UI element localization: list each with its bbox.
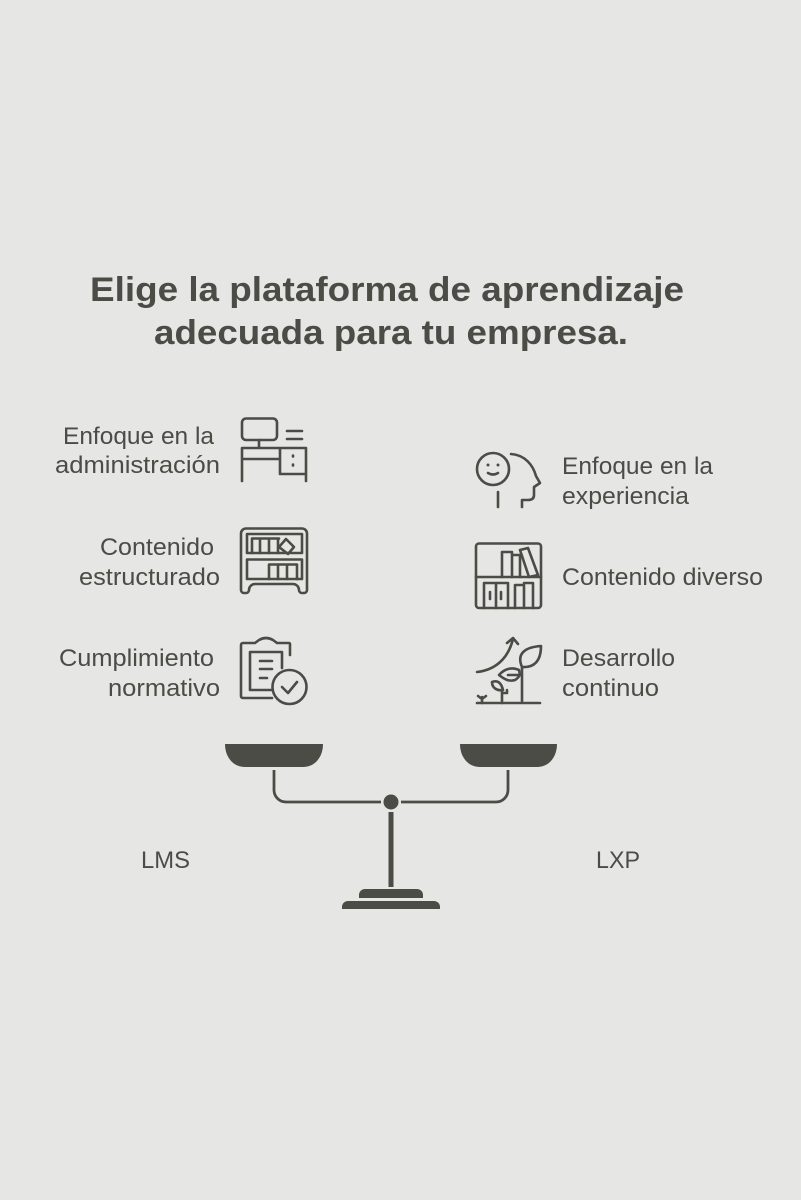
title: adecuada para tu empresa. bbox=[154, 314, 628, 352]
icon: growing plants bbox=[477, 638, 541, 703]
beam bbox=[274, 770, 508, 802]
lower base bbox=[342, 901, 440, 909]
text: Cumplimiento normativo: Cumplimiento bbox=[59, 645, 214, 672]
left pan bbox=[225, 744, 323, 767]
icon: desk with computer bbox=[242, 418, 306, 481]
text: Enfoque en la experiencia: experiencia bbox=[562, 483, 690, 510]
text: Contenido estructurado: Contenido bbox=[100, 534, 214, 561]
text: Desarrollo continuo bbox=[562, 645, 675, 702]
pivot bbox=[384, 794, 398, 810]
label: LXP: LXP bbox=[596, 847, 640, 874]
upper base bbox=[359, 889, 423, 898]
post bbox=[388, 812, 394, 887]
text: Contenido estructurado bbox=[79, 534, 220, 591]
icon: compliance clipboard bbox=[241, 638, 306, 704]
icon: diverse bookshelf bbox=[476, 544, 541, 608]
text: Enfoque en la administración bbox=[55, 423, 220, 479]
text: Enfoque en la experiencia bbox=[562, 453, 714, 510]
text: Contenido estructurado: estructurado bbox=[79, 564, 220, 591]
text: Desarrollo continuo: continuo bbox=[562, 675, 659, 702]
panel: LMS features bbox=[55, 418, 307, 704]
panel: LXP features bbox=[476, 453, 763, 703]
title bbox=[90, 271, 684, 352]
text: Enfoque en la experiencia: Enfoque en la bbox=[562, 453, 714, 480]
icon: head with smiling face bbox=[477, 453, 540, 507]
text: Contenido diverso: Contenido diverso bbox=[562, 564, 763, 591]
text: Enfoque en la administración: Enfoque en la bbox=[63, 423, 215, 450]
text: Enfoque en la administración: administración bbox=[55, 452, 220, 479]
label: LMS: LMS bbox=[141, 847, 190, 874]
icon: structured bookshelf bbox=[241, 528, 307, 593]
right pan bbox=[460, 744, 557, 767]
balance scale bbox=[225, 744, 557, 909]
text: Desarrollo continuo: Desarrollo bbox=[562, 645, 675, 672]
text: Cumplimiento normativo: normativo bbox=[108, 675, 220, 702]
title: Elige la plataforma de aprendizaje bbox=[90, 271, 684, 309]
text: Cumplimiento normativo bbox=[59, 645, 220, 702]
